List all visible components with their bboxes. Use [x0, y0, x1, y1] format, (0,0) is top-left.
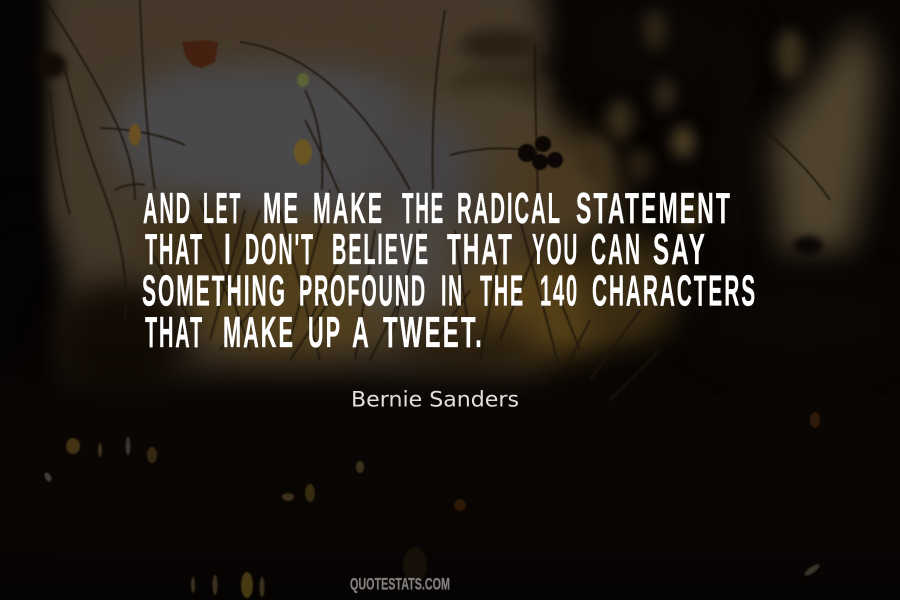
- right hand glow: [770, 20, 878, 255]
- dark bud on the right: [793, 236, 823, 256]
- line 2: SAY: [653, 226, 707, 274]
- line 2: BELIEVE: [332, 226, 430, 274]
- line 3: THE: [480, 268, 525, 316]
- line 1: MAKE: [313, 185, 384, 233]
- line 1: THE: [402, 185, 445, 233]
- line 1: RADICAL: [457, 185, 562, 233]
- small yellow-green buds: [129, 73, 312, 165]
- quote text: [142, 185, 757, 357]
- line 2: THAT: [145, 226, 204, 274]
- line 2: DON'T: [245, 226, 315, 274]
- line 2: I: [224, 226, 233, 274]
- line 1: STATEMENT: [576, 185, 732, 233]
- line 3: IN: [441, 268, 464, 316]
- line 3: PROFOUND: [299, 268, 427, 316]
- line 4: MAKE: [223, 309, 295, 357]
- author name: Bernie Sanders: [351, 388, 519, 412]
- line 1: AND: [143, 185, 192, 233]
- line 4: UP: [308, 309, 342, 357]
- dark trunk on the left: [0, 0, 45, 600]
- dark leaf: [182, 40, 218, 68]
- line 2: THAT: [447, 226, 514, 274]
- line 3: 140: [540, 268, 579, 316]
- line 4: THAT: [145, 309, 204, 357]
- line 3: SOMETHING: [142, 268, 287, 316]
- line 1: [143, 185, 732, 233]
- line 3: [142, 268, 757, 316]
- grass stems: [45, 0, 830, 400]
- speckled highlights at the bottom: [43, 412, 821, 598]
- line 2: [145, 226, 707, 274]
- line 4: [145, 309, 484, 357]
- dark area at top centre: [565, 0, 745, 105]
- watermark: QUOTESTATS.COM: [350, 574, 450, 594]
- line 2: YOU: [532, 226, 579, 274]
- dark flower: [518, 136, 563, 170]
- line 1: LET: [203, 185, 242, 233]
- line 4: A: [352, 309, 371, 357]
- line 4: TWEET.: [383, 309, 484, 357]
- line 2: CAN: [591, 226, 642, 274]
- line 1: ME: [263, 185, 300, 233]
